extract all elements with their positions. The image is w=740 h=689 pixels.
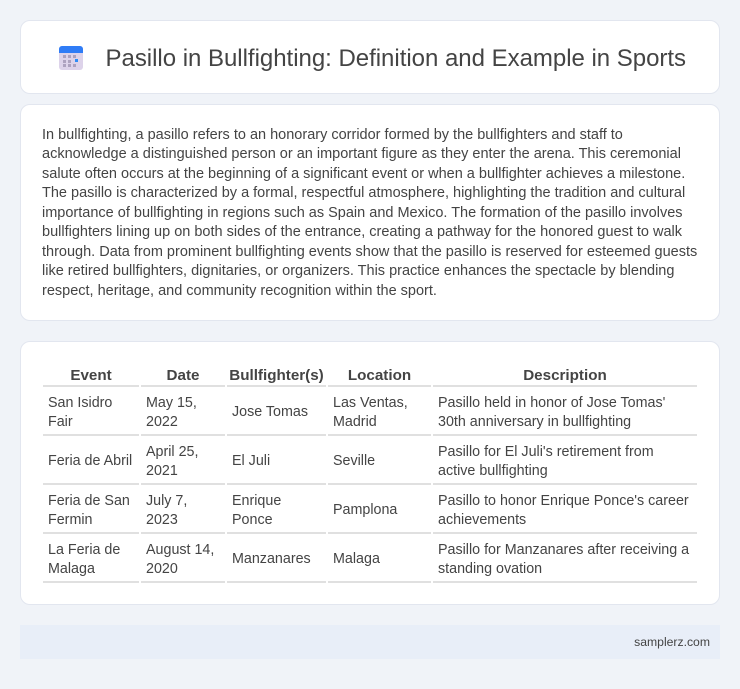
table row: San Isidro Fair: Madrid <box>333 414 377 430</box>
text block: description: The pasillo is characterized by a formal, respectful atmosphere, highlighting the tradition and cultural <box>42 185 685 201</box>
table row: San Isidro Fair <box>43 394 697 436</box>
table row: La Feria de Malaga: Manzanares <box>232 551 311 567</box>
table header <box>43 366 697 387</box>
table row: Feria de Abril: April 25, <box>146 444 198 460</box>
table row: La Feria de Malaga <box>43 542 697 583</box>
table row: Feria de San Fermin: Fermin <box>48 512 92 528</box>
text block: description: bullfighters lining up on both sides of the entrance, creating a pathway for the honored guest to walk <box>42 224 682 240</box>
table row: Feria de Abril: active bullfighting <box>438 463 548 479</box>
table row: Feria de Abril: Feria de Abril <box>48 453 132 469</box>
text block: description: salute often occurs at the beginning of a significant event or when a bullfighter achieves a milestone. <box>42 166 685 182</box>
table row: Feria de San Fermin: 2023 <box>146 512 178 528</box>
text block: description: acknowledge a distinguished person or an important figure as they enter the arena. This ceremonial <box>42 146 681 162</box>
text block: description: like retired bullfighters, dignitaries, or organizers. This practice enhances the spectacle by blending <box>42 263 674 279</box>
table row: San Isidro Fair: 30th anniversary in bullfighting <box>438 414 631 430</box>
table row: Feria de San Fermin: Feria de San <box>48 492 130 508</box>
heading: Pasillo in Bullfighting: Definition and Example in Sports <box>106 45 686 72</box>
table row: San Isidro Fair: Las Ventas, <box>333 394 408 410</box>
table row: Feria de Abril <box>43 444 697 485</box>
text block: description <box>42 126 697 298</box>
table row: Feria de Abril: El Juli <box>232 453 270 469</box>
table row: Feria de Abril: Seville <box>333 453 375 469</box>
table row: Feria de San Fermin: July 7, <box>146 492 187 508</box>
table row: Feria de San Fermin: Ponce <box>232 512 273 528</box>
table row: La Feria de Malaga: Malaga <box>333 551 380 567</box>
table row: Feria de San Fermin: Enrique <box>232 492 281 508</box>
footer credit: samplerz.com <box>634 635 710 649</box>
table row: San Isidro Fair: San Isidro <box>48 394 112 410</box>
table row: San Isidro Fair: Fair <box>48 414 73 430</box>
footer <box>20 625 720 659</box>
text block: description: through. Data from prominent bullfighting events show that the pasillo is reserved for esteemed guests <box>42 244 697 260</box>
table row: San Isidro Fair: Jose Tomas <box>232 404 308 420</box>
text block: description: respect, heritage, and community recognition within the sport. <box>42 282 437 298</box>
table row: Feria de San Fermin: Pamplona <box>333 502 397 518</box>
table header: Description <box>523 366 607 384</box>
table row: La Feria de Malaga: Malaga <box>48 561 95 577</box>
table row: La Feria de Malaga: La Feria de <box>48 542 120 558</box>
table header: Location <box>348 366 411 384</box>
panel: title <box>20 20 720 94</box>
table row: La Feria de Malaga: 2020 <box>146 561 178 577</box>
text block: description: In bullfighting, a pasillo refers to an honorary corridor formed by the bullfighters and staff to <box>42 126 623 142</box>
table row: Feria de San Fermin: Pasillo to honor Enrique Ponce's career <box>438 492 689 508</box>
table row: Feria de San Fermin <box>43 492 697 534</box>
table header: Event <box>70 366 112 384</box>
table row: San Isidro Fair: May 15, <box>146 394 197 410</box>
table row: La Feria de Malaga: Pasillo for Manzanares after receiving a <box>438 542 689 558</box>
table row: Feria de Abril: 2021 <box>146 463 178 479</box>
icon: calendar <box>59 46 83 70</box>
table row: San Isidro Fair: 2022 <box>146 414 178 430</box>
table header: Bullfighter(s) <box>229 366 324 384</box>
table row: La Feria de Malaga: August 14, <box>146 542 214 558</box>
table row: Feria de San Fermin: achievements <box>438 512 526 528</box>
table row: La Feria de Malaga: standing ovation <box>438 561 542 577</box>
table header: Date <box>167 366 199 384</box>
table row: Feria de Abril: Pasillo for El Juli's retirement from <box>438 444 654 460</box>
panel: description <box>20 104 720 321</box>
table row: San Isidro Fair: Pasillo held in honor of Jose Tomas' <box>438 394 665 410</box>
panel: events table <box>20 341 720 605</box>
text block: description: importance of bullfighting in regions such as Spain and Mexico. The formation of the pasillo involves <box>42 204 683 220</box>
